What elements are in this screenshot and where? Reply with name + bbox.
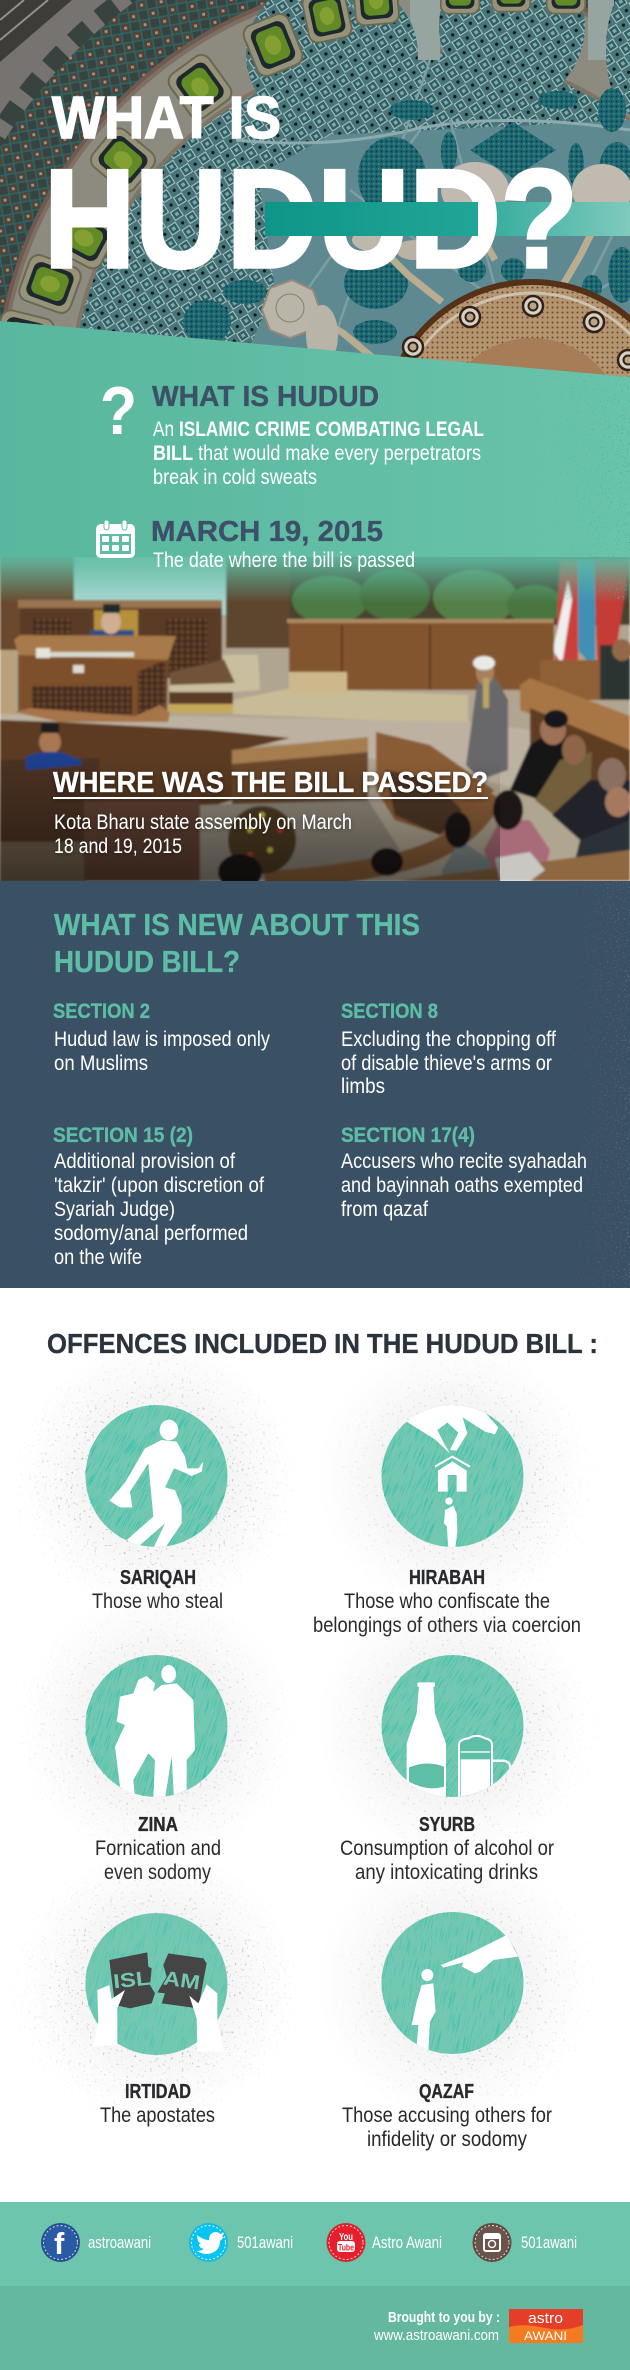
icon: torn Islam book: AM [162,1967,201,1994]
text: hudud definition: break in cold sweats [153,466,317,489]
facebook: astroawani [88,2233,151,2252]
floor [0,714,530,790]
panel: social media band [0,2202,630,2286]
front clerk desk [14,635,176,722]
offence: irtidad [14,1859,296,2126]
description: qazaf: infidelity or sodomy [367,2128,527,2151]
label: irtidad: IRTIDAD [125,2081,191,2103]
offence: sariqah [14,1351,296,1608]
steps [169,655,468,724]
teal bar behind title [265,202,630,236]
teal bar over title [265,202,478,236]
description: zina: Fornication and [95,1837,221,1860]
credit: www.astroawani.com [373,2327,499,2344]
twitter: 501awani [237,2233,293,2252]
right wood wall [287,619,630,700]
section 8: Excluding the chopping off [341,1028,556,1051]
photo shading [0,773,500,881]
section 15 (2): Syariah Judge) [54,1198,175,1221]
panel: intro green section [0,321,630,600]
text: location [54,811,352,858]
right bench [520,639,630,790]
section 17(4) [341,1124,587,1221]
heading: offences: OFFENCES INCLUDED IN THE HUDUD BILL : [47,1328,598,1359]
section 8: limbs [341,1075,385,1098]
youtube: Tube [338,2242,354,2252]
text: location: 18 and 19, 2015 [54,835,182,858]
text: location: Kota Bharu state assembly on March [54,811,352,834]
panel: hero mosque dome photo [0,0,630,377]
section 15 (2): SECTION 15 (2) [53,1124,193,1147]
foreground desks [0,720,494,882]
logo: astro awani: astro [528,2310,563,2327]
icon: accusing hand [381,1912,524,2054]
panel: offences [0,1328,610,2151]
section 15 (2): sodomy/anal performed [54,1222,248,1245]
description: hirabah [313,1590,581,1637]
section 15 (2): on the wife [54,1246,142,1269]
heading: what is new: HUDUD BILL? [54,944,240,979]
offence: syurb [333,1602,591,1884]
heading underline [53,797,488,799]
standing speaker [466,656,508,780]
flags [552,560,630,662]
facebook [41,2223,151,2262]
member at foreground left [26,723,82,770]
icon: thief [85,1405,227,1547]
section 8: of disable thieve's arms or [341,1052,552,1075]
section 17(4): from qazaf [341,1198,428,1221]
label: syurb: SYURB [419,1814,475,1836]
panel: what is new [0,881,630,1288]
section 17(4): SECTION 17(4) [341,1124,475,1147]
section 15 (2): Additional provision of [54,1150,235,1173]
description: syurb [340,1837,554,1884]
description: zina [95,1837,221,1884]
twitter [189,2223,293,2262]
offence: qazaf [333,1864,590,2150]
panel: court photo [0,535,630,890]
heading: what is new [54,907,420,979]
description: hirabah: Those who confiscate the [344,1590,550,1613]
section 2: Hudud law is imposed only [54,1028,270,1051]
section 2 [53,1000,270,1075]
facebook: f [54,2226,65,2261]
icon: torn Islam book: ISL [112,1968,152,1993]
dark speckle texture [580,881,630,1288]
text: date description: The date where the bill is passed [153,549,415,572]
left carpet [0,650,16,720]
credit: Brought to you by : [388,2309,500,2326]
label: qazaf: QAZAF [419,2081,474,2103]
description: irtidad: The apostates [100,2104,215,2127]
section 15 (2): 'takzir' (upon discretion of [54,1174,264,1197]
icon: bottle and mug [381,1655,524,1797]
text: hudud definition: BILL that would make every perpetrators [153,442,481,465]
seated members [218,710,630,890]
label: hirabah: HIRABAH [409,1567,485,1589]
heading: what is hudud: WHAT IS HUDUD [152,381,379,413]
description: sariqah: Those who steal [92,1590,223,1613]
green spatter [534,375,630,600]
description: qazaf: Those accusing others for [342,2104,552,2127]
description: syurb: Consumption of alcohol or [340,1837,554,1860]
title: what is hudud [44,85,630,297]
credit [373,2309,500,2344]
instagram: 501awani [521,2233,577,2252]
rear speaker desk [18,600,222,678]
heading: march 19 2015: MARCH 19, 2015 [151,516,383,548]
label: zina: ZINA [138,1814,178,1836]
offence: hirabah [313,1340,610,1637]
panel: where was the bill passed [53,767,488,858]
offence: zina [21,1602,292,1884]
youtube: Astro Awani [372,2233,442,2252]
description: hirabah: belongings of others via coercion [313,1614,581,1637]
section 17(4): and bayinnah oaths exempted [341,1174,583,1197]
section 15 (2) [53,1124,264,1269]
text: hudud definition: An ISLAMIC CRIME COMBATING LEGAL [153,418,484,441]
description: syurb: any intoxicating drinks [355,1861,538,1884]
section 8 [341,1000,556,1098]
icon: hand and house [382,1405,524,1547]
section 2: SECTION 2 [53,1000,150,1023]
text: hudud definition [153,418,484,489]
icon: torn Islam book [85,1914,227,2056]
icon: couple [85,1655,227,1797]
icon: question mark: ? [100,373,137,449]
icon: calendar [96,520,135,558]
flowers [228,806,296,874]
plants [290,569,560,620]
title line 1: WHAT IS [52,85,281,151]
description: zina: even sodomy [104,1861,211,1884]
heading: what is new: WHAT IS NEW ABOUT THIS [54,907,420,942]
label: sariqah: SARIQAH [120,1567,196,1589]
instagram [472,2223,577,2262]
description: qazaf [342,2104,552,2151]
title line 2: HUDUD? [44,140,578,297]
panel: footer [0,2286,630,2370]
section 8: SECTION 8 [341,1000,438,1023]
youtube: You [339,2232,353,2243]
logo: astro awani: AWANI [524,2329,567,2343]
heading: where was the bill passed: WHERE WAS THE BILL PASSED? [53,767,488,799]
section 2: on Muslims [54,1052,148,1075]
youtube [326,2223,442,2262]
logo: astro awani [509,2309,583,2343]
section 17(4): Accusers who recite syahadah [341,1150,587,1173]
